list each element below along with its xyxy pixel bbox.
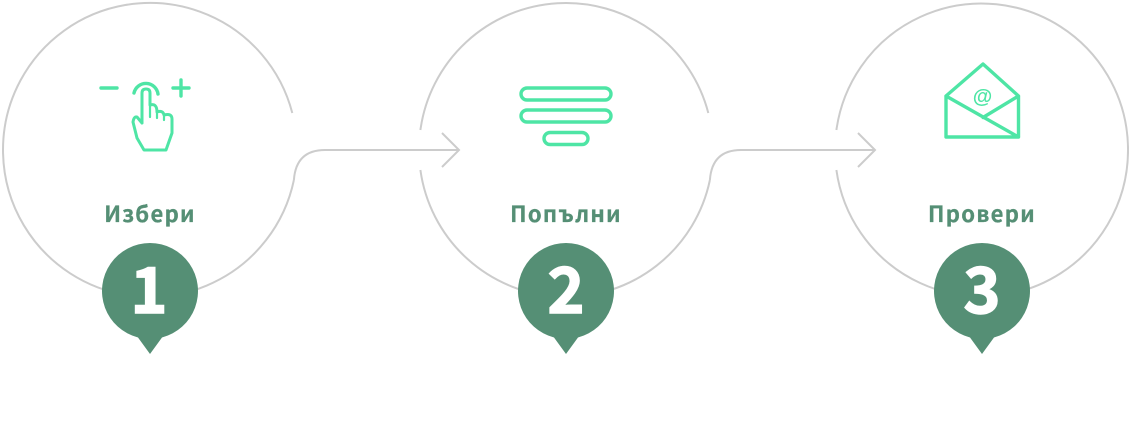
step 1 ring: [3, 3, 294, 297]
step 2: Попълни: [420, 3, 710, 354]
number pin 2: [518, 241, 614, 354]
number pin 1: 1: [130, 241, 168, 332]
number pin 2: 2: [547, 241, 585, 332]
step 3: Провери: [836, 4, 1128, 354]
icon: hand tapping: [101, 80, 189, 150]
icon: form lines: [521, 88, 611, 144]
number pin 3: [934, 241, 1030, 354]
step 3 ring: [836, 4, 1128, 297]
arrow: step 1 to step 2: [294, 133, 459, 180]
step 2 ring: [420, 3, 710, 297]
arrow: step 2 to step 3: [710, 133, 875, 180]
number pin 1: [102, 241, 198, 354]
number pin 3: 3: [963, 241, 1001, 332]
label: Попълни: Попълни: [510, 197, 622, 229]
icon: open envelope: [946, 64, 1018, 137]
icon: open envelope: @: [973, 86, 992, 108]
label: Провери: Провери: [928, 197, 1036, 229]
step 1: Избери: [3, 3, 294, 354]
label: Избери: Избери: [104, 197, 196, 229]
